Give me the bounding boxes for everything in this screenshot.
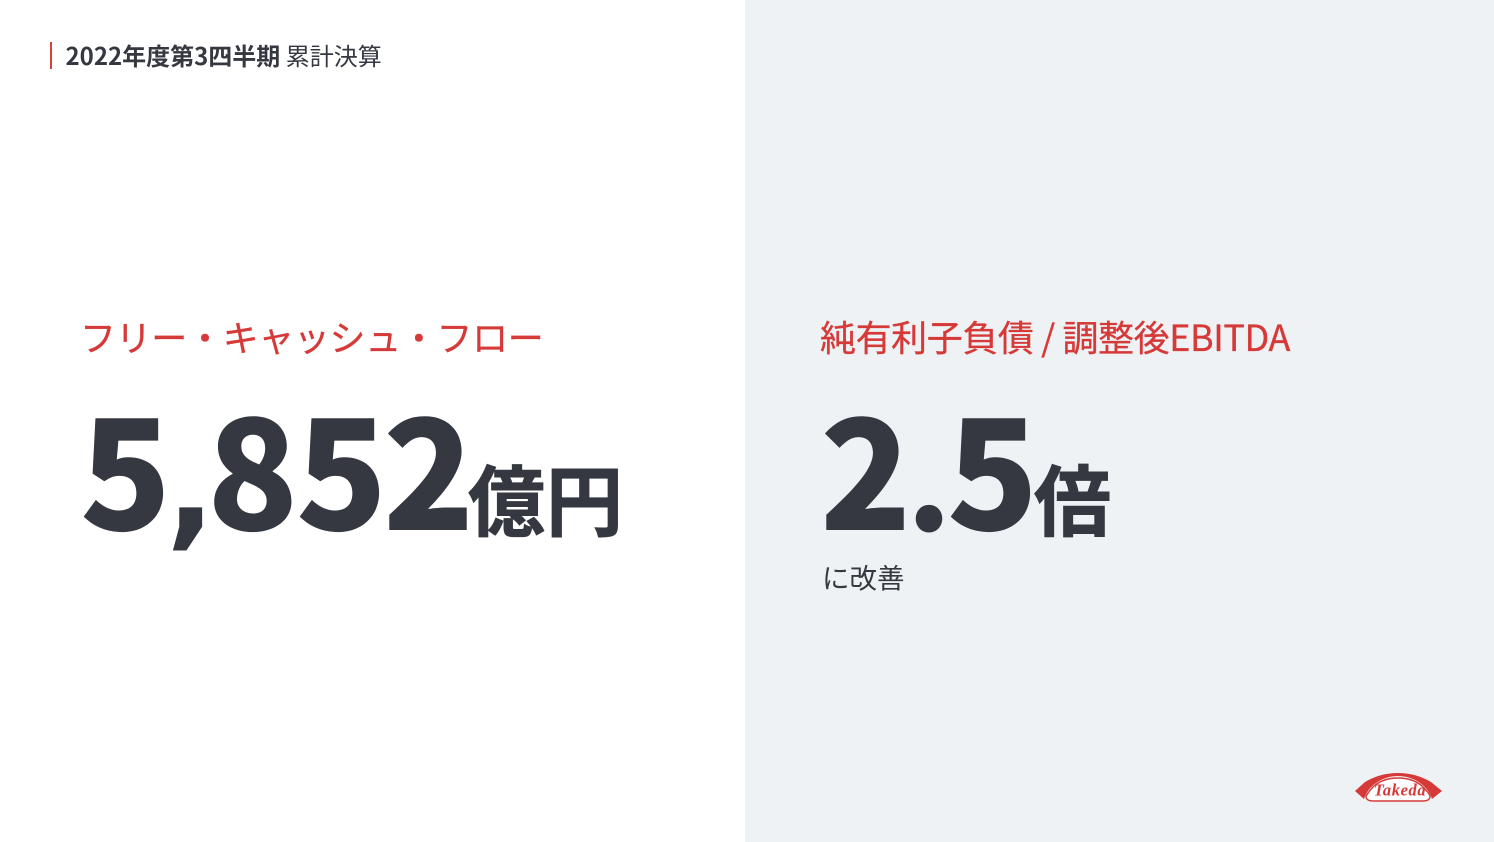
- value: 5,852 oku yen: 億円: [468, 442, 624, 553]
- panel: free cash flow: [80, 310, 624, 574]
- label: net debt / adjusted EBITDA: 純有利子負債 / 調整後EBITDA: [820, 310, 1290, 362]
- value: 2.5 times: 倍: [1034, 442, 1112, 553]
- value: 5,852 oku yen: 5: [296, 357, 387, 574]
- header accent bar: [50, 42, 52, 69]
- value: 2.5 times: 2: [820, 357, 911, 574]
- value: 5,852 oku yen: [80, 357, 624, 574]
- panel: net debt ratio: [820, 310, 1290, 596]
- heading: period title: 2022年度第3四半期 累計決算: [66, 37, 382, 72]
- value: 5,852 oku yen: 5: [80, 357, 171, 574]
- value: 2.5 times: 5: [947, 357, 1038, 574]
- value: 5,852 oku yen: 2: [383, 357, 474, 574]
- value: 2.5 times: [820, 357, 1112, 574]
- value: 2.5 times: .: [907, 386, 951, 567]
- value: 5,852 oku yen: 8: [207, 357, 298, 574]
- icon: Takeda logo: Takeda: [1374, 780, 1426, 800]
- label: free cash flow: フリー・キャッシュ・フロー: [80, 310, 543, 362]
- icon: Takeda logo: [1355, 773, 1442, 802]
- panel: right background: [745, 0, 1494, 842]
- note: improved: に改善: [822, 556, 904, 596]
- value: 5,852 oku yen: ,: [166, 411, 215, 563]
